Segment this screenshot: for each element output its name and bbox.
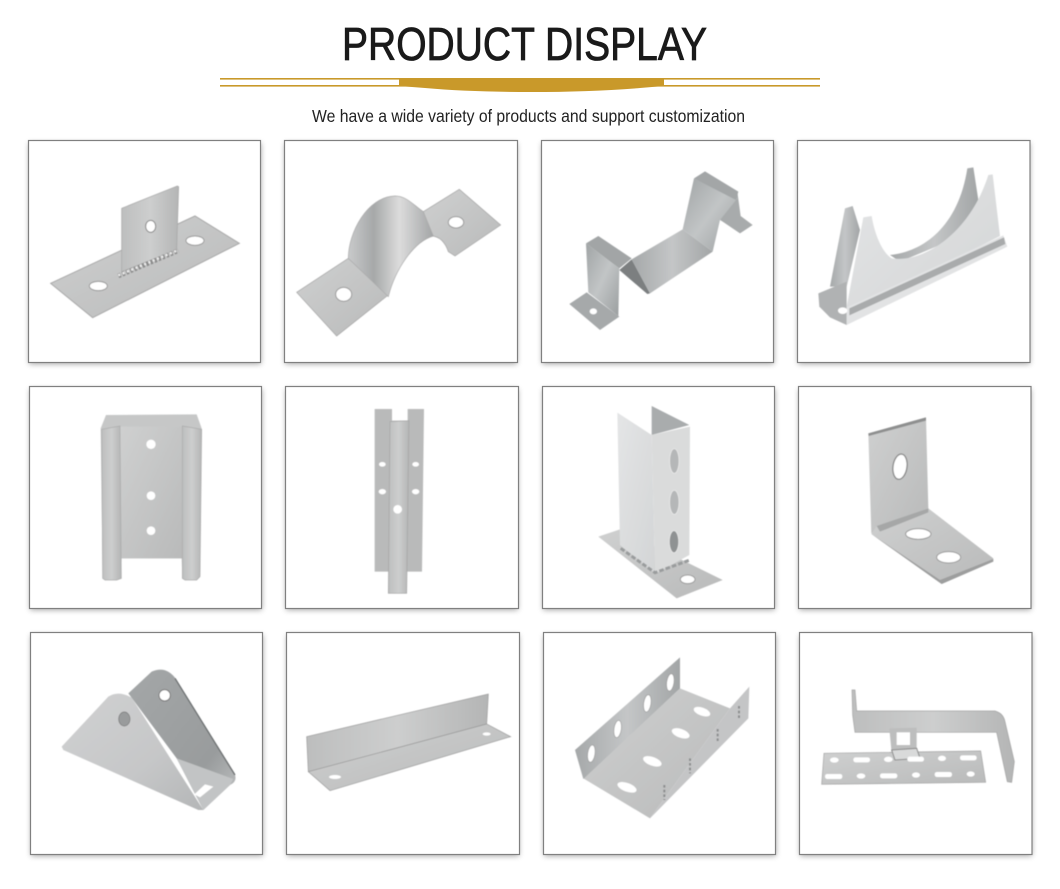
panel: angle bracket <box>798 386 1031 610</box>
title: PRODUCT DISPLAY <box>342 18 707 70</box>
panel: slim hat channel <box>286 386 518 610</box>
panel: C channel with three holes <box>30 386 262 610</box>
panel: pipe saddle support <box>798 140 1030 364</box>
panel: hat channel bracket <box>542 140 774 364</box>
panel: slotted post base <box>542 386 775 610</box>
panel: saddle clamp <box>284 140 518 364</box>
panel: slotted U tray <box>544 632 776 856</box>
panel: triangular bracket <box>30 632 263 856</box>
panel: hook bracket with perforated plate <box>800 632 1032 856</box>
subtitle: We have a wide variety of products and support customization <box>312 106 745 126</box>
panel: welded T bracket <box>28 140 261 364</box>
gold heading divider <box>220 78 820 92</box>
panel: long angle <box>286 632 520 856</box>
